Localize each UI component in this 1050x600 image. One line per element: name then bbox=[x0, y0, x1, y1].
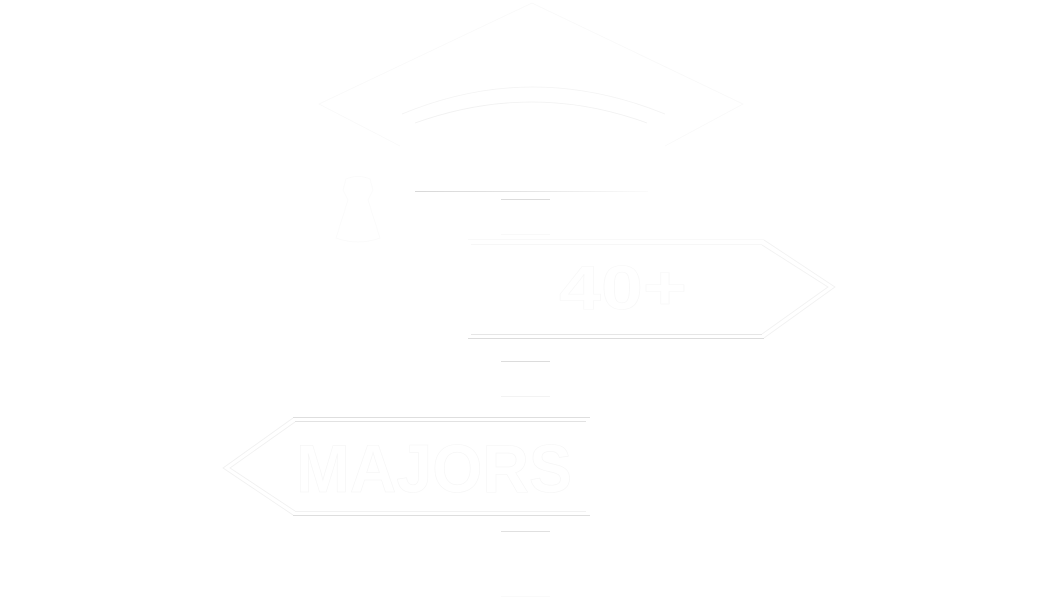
arrow outer top edge bbox=[468, 238, 764, 240]
arrow sign: 40+ bbox=[468, 240, 835, 338]
post mark top bbox=[501, 199, 550, 200]
arrow inner top edge bbox=[471, 244, 762, 246]
arrow outer top edge bbox=[293, 416, 590, 418]
cap board outline bbox=[319, 3, 743, 146]
arrow point bbox=[762, 240, 835, 338]
post mark middle bbox=[501, 361, 550, 362]
arrow inner top edge bbox=[295, 420, 586, 422]
cap base line bbox=[415, 191, 648, 192]
arrow inner bottom edge bbox=[471, 334, 762, 336]
cap outer arc bbox=[402, 87, 665, 114]
arrow outer bottom edge bbox=[468, 338, 764, 340]
post mark lower bbox=[501, 531, 550, 532]
post mark bottom faint bbox=[501, 596, 550, 597]
arrow point bbox=[223, 418, 295, 515]
icon: graduation cap bbox=[319, 3, 743, 242]
number: 40+: 40+ bbox=[559, 254, 687, 323]
post mark upper faint bbox=[501, 234, 550, 235]
signpost segments bbox=[501, 199, 550, 597]
arrow outer bottom edge bbox=[293, 514, 590, 516]
post mark middle faint bbox=[501, 396, 550, 397]
tassel bbox=[336, 176, 380, 242]
cap inner arc bbox=[415, 102, 647, 123]
label: MAJORS: MAJORS bbox=[296, 431, 572, 507]
arrow sign: MAJORS bbox=[223, 418, 590, 516]
arrow inner bottom edge bbox=[295, 510, 586, 512]
